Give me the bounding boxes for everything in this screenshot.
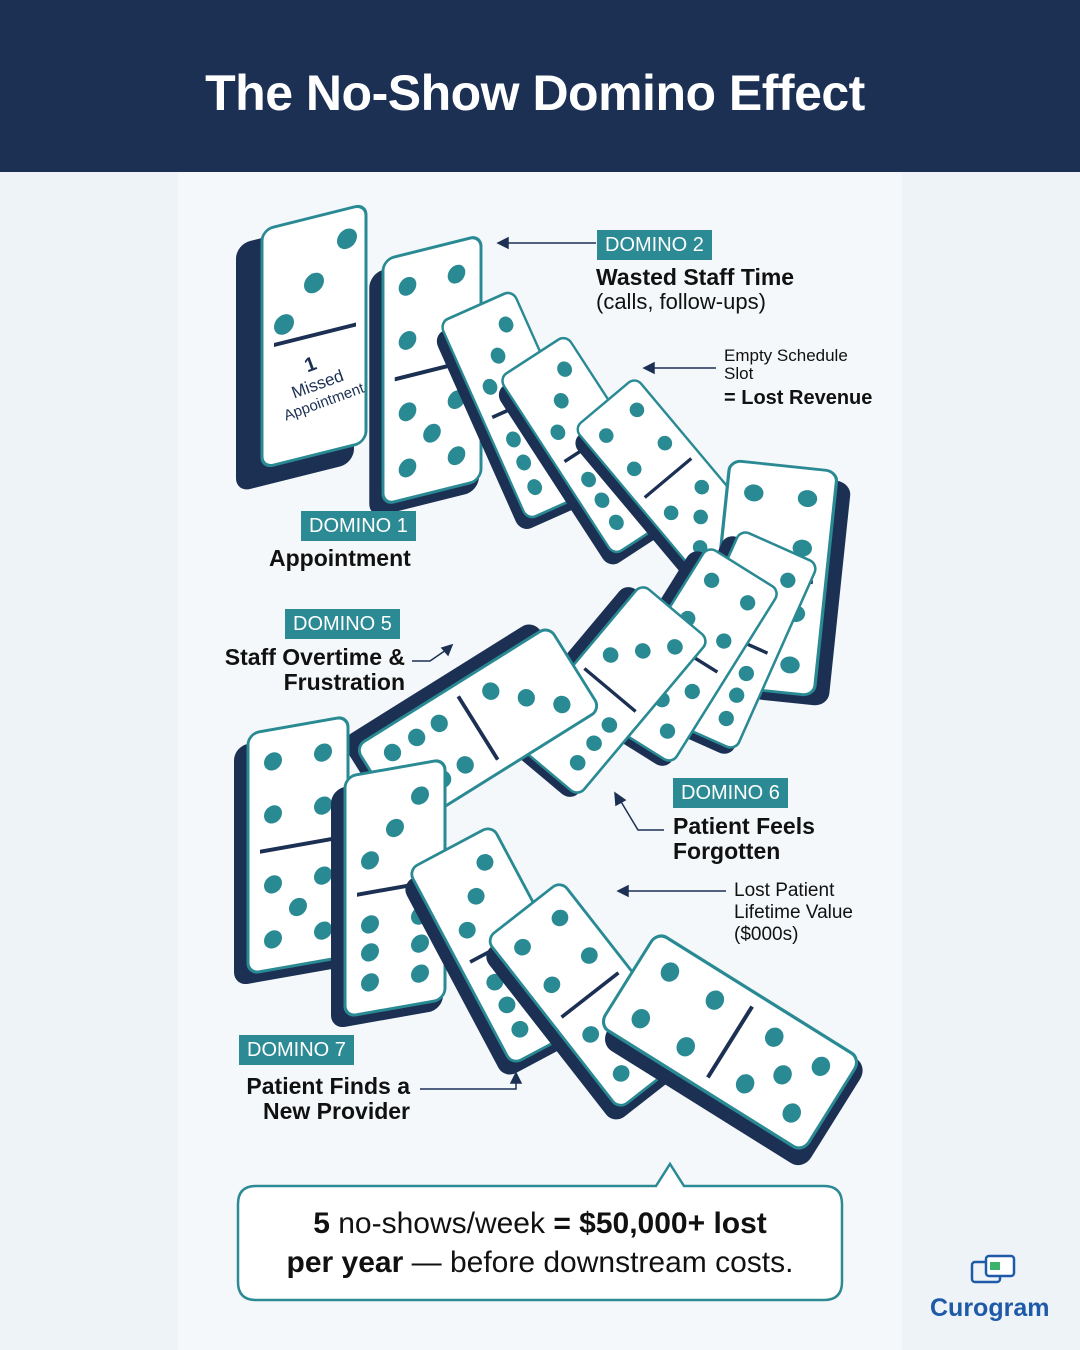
- label: domino 2: [597, 230, 712, 260]
- text: patient feels forgotten: Patient Feels: [673, 813, 815, 839]
- text: lost patient lifetime value: ($000s): [734, 924, 798, 945]
- text: lost patient lifetime value: Lifetime Value: [734, 902, 853, 923]
- label: domino 6: [673, 778, 788, 808]
- text: patient feels forgotten: Forgotten: [673, 838, 780, 864]
- label: domino 5: [285, 609, 400, 639]
- text: 1 missed appointment: 1: [302, 353, 320, 377]
- logo: Curogram: [930, 1294, 1049, 1322]
- callout box: [238, 1164, 842, 1300]
- text: lost patient lifetime value: [734, 880, 853, 945]
- label: domino 7: [239, 1035, 354, 1065]
- text: empty schedule slot: [724, 346, 848, 383]
- text: lost patient lifetime value: Lost Patient: [734, 880, 834, 901]
- label: domino 1: [301, 511, 416, 541]
- text: 1 missed appointment: Missed: [289, 366, 346, 402]
- domino 6 standing right: [706, 460, 853, 707]
- text: (calls, follow-ups): [596, 289, 766, 314]
- text: 1 missed appointment: [267, 340, 367, 424]
- text: staff overtime: Frustration: [284, 669, 405, 695]
- domino 1 standing with text: [236, 204, 366, 492]
- arrows: [412, 238, 726, 1089]
- text: wasted staff time: Wasted Staff Time: [596, 264, 794, 290]
- text: appointment: Appointment: [269, 545, 411, 571]
- logo icon: [972, 1256, 1014, 1282]
- dominoes 13-15 falling: [396, 825, 600, 1079]
- label: domino 2: DOMINO 2: [605, 234, 704, 256]
- text: 1 missed appointment: Appointment: [282, 379, 367, 424]
- text: staff overtime: Staff Overtime &: [225, 644, 405, 670]
- text: patient feels forgotten: [673, 813, 815, 864]
- domino 2 standing: [369, 235, 481, 518]
- callout text: per year — before downstream costs.: [287, 1246, 793, 1279]
- label: domino 5: DOMINO 5: [293, 613, 392, 635]
- text: empty schedule slot: Slot: [724, 364, 753, 383]
- text: staff overtime: [225, 644, 405, 695]
- dominoes 7-10 falling left: [643, 525, 818, 758]
- text: = Lost Revenue: [724, 387, 872, 409]
- label: domino 1: DOMINO 1: [309, 515, 408, 537]
- callout text: [287, 1207, 793, 1279]
- callout text: 5 no-shows/week = $50,000+ lost: [313, 1207, 767, 1240]
- label: domino 6: DOMINO 6: [681, 782, 780, 804]
- title: The No-Show Domino Effect: [205, 65, 865, 121]
- text: patient finds a new provider: [246, 1073, 410, 1124]
- dominoes 11-12 standing left: [234, 716, 348, 986]
- label: domino 7: DOMINO 7: [247, 1039, 346, 1061]
- text: patient finds a new provider: Patient Finds a: [246, 1073, 410, 1099]
- dominoes 3-5 falling: [429, 290, 604, 533]
- text: empty schedule slot: Empty Schedule: [724, 346, 848, 365]
- header: [0, 0, 1080, 172]
- text: patient finds a new provider: New Provider: [263, 1098, 410, 1124]
